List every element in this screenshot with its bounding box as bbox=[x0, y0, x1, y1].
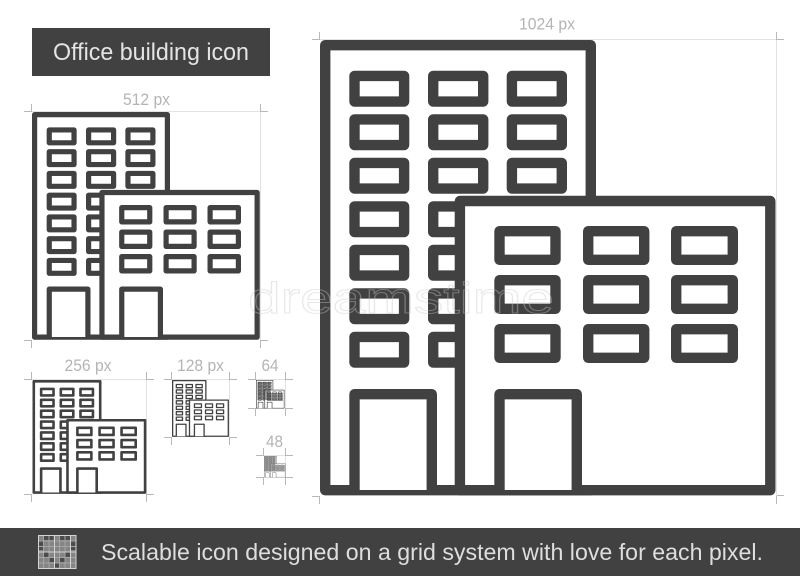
guides: 256 px icon bbox=[24, 372, 154, 502]
tall building door bbox=[354, 394, 432, 490]
guides: 128 px icon bbox=[164, 372, 237, 445]
icon: office building 1024 px bbox=[325, 45, 770, 490]
icon: office building 64 px bbox=[256, 380, 284, 408]
guides: 48 px icon bbox=[256, 448, 293, 485]
guides: 1024 px icon bbox=[312, 32, 784, 504]
footer caption: Scalable icon designed on a grid system with love for each pixel. bbox=[101, 539, 763, 565]
tall building outline bbox=[325, 45, 591, 490]
front building windows bbox=[500, 231, 733, 358]
guides: 64 px icon bbox=[248, 372, 293, 416]
label: 64: 64 bbox=[262, 357, 278, 375]
label: 1024 px: 1024 px bbox=[519, 16, 576, 34]
label: 256 px: 256 px bbox=[64, 357, 112, 375]
icon: office building 48 px bbox=[264, 456, 285, 477]
watermark: dreamstime bbox=[248, 274, 554, 323]
label: 512 px: 512 px bbox=[123, 91, 171, 109]
front building door bbox=[500, 394, 577, 490]
label: 128 px: 128 px bbox=[177, 357, 225, 375]
icon: pixel grid bbox=[38, 535, 76, 569]
icon: office building 128 px bbox=[173, 381, 228, 436]
title banner bbox=[32, 28, 270, 76]
tall building windows bbox=[354, 76, 562, 363]
guides: 512 px icon bbox=[24, 104, 268, 348]
front building outline bbox=[460, 201, 770, 490]
title banner: Office building icon bbox=[53, 39, 249, 66]
icon: office building 256 px bbox=[34, 381, 145, 493]
icon: office building 512 px bbox=[35, 115, 257, 337]
label: 48: 48 bbox=[266, 433, 283, 451]
footer bar bbox=[0, 528, 800, 576]
